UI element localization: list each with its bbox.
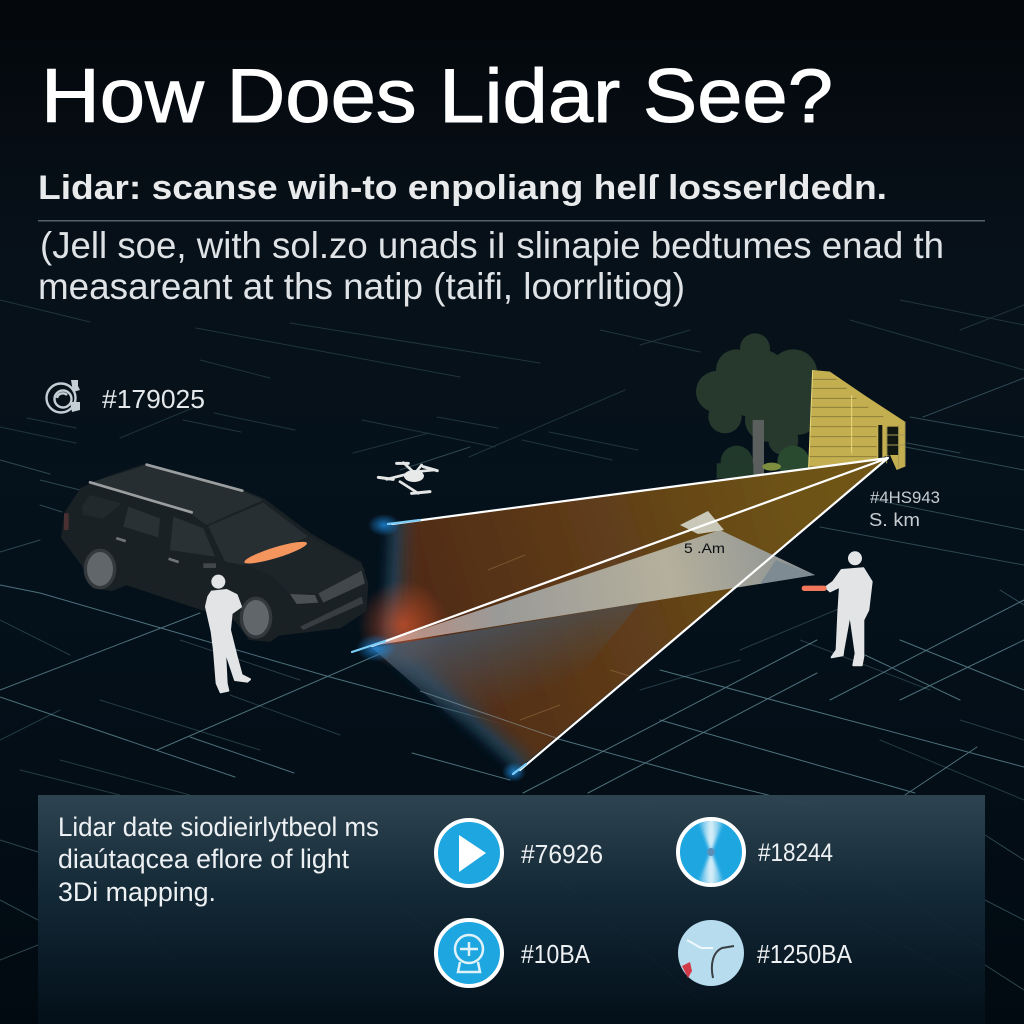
person standing xyxy=(206,575,250,692)
range labels: S. km xyxy=(869,510,920,530)
icon: play xyxy=(436,820,502,886)
wheels xyxy=(85,550,271,637)
legend icon and code: #179025 xyxy=(102,384,205,414)
distance label: 5 .Am xyxy=(684,541,725,556)
panel description: Lidar date siodieirlytbeol ms xyxy=(58,812,379,842)
car roof and windows xyxy=(82,465,365,594)
car body xyxy=(63,465,367,640)
tree xyxy=(696,333,822,478)
panel description: 3Di mapping. xyxy=(58,877,216,907)
windshield light bar xyxy=(243,538,308,567)
code: map: #1250BA xyxy=(757,939,853,969)
panel description xyxy=(58,812,379,907)
laser beams xyxy=(352,458,888,774)
intro text: (Jell soe, with sol.zo unads iI slinapie bedtumes enad th xyxy=(40,225,944,266)
emitter glows xyxy=(356,514,526,782)
code: plus bulb: #10BA xyxy=(521,939,591,969)
roof rails xyxy=(90,465,242,512)
laser scan fan xyxy=(360,460,882,770)
title: How Does Lidar See? xyxy=(41,54,833,139)
car xyxy=(63,465,367,640)
icon: map xyxy=(678,920,744,986)
icon: plus bulb xyxy=(436,920,502,986)
subtitle: Lidar: scanse wih-to enpoliang helſ losserldedn. xyxy=(38,169,887,207)
divider rule xyxy=(38,220,985,222)
icon: disc xyxy=(678,818,744,886)
legend icon and code xyxy=(46,380,205,414)
grille and headlight xyxy=(64,513,365,630)
range labels: #4HS943 xyxy=(870,488,940,507)
code: disc: #18244 xyxy=(758,839,833,867)
range labels xyxy=(869,488,940,530)
pale reflected wedge xyxy=(372,511,815,646)
perspective grid xyxy=(0,300,1024,1000)
code: play: #76926 xyxy=(521,839,603,869)
intro text: measareant at ths natip (taifi, loorrlitiog) xyxy=(38,266,685,307)
info panel xyxy=(38,795,985,1024)
drone xyxy=(378,463,437,493)
scanned building xyxy=(808,370,905,495)
intro text xyxy=(38,225,944,307)
panel description: diaútaqcea eflore of light xyxy=(58,844,349,874)
person with scanner xyxy=(802,551,872,665)
